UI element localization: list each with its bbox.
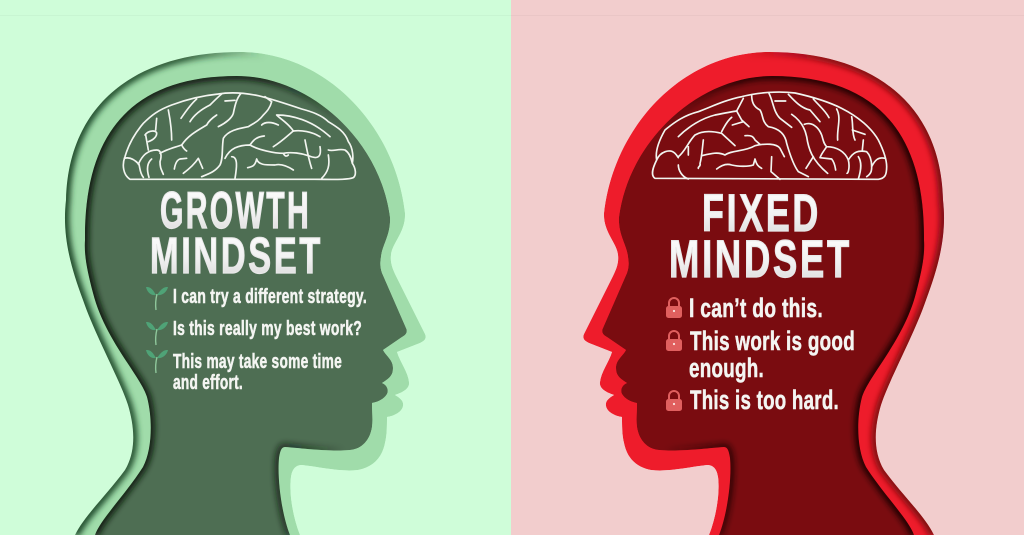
statement: This is too hard: This is too hard. — [690, 385, 839, 415]
icon: brain outline, fixed — [652, 92, 887, 179]
heading: growth mindset: GROWTH — [160, 182, 311, 240]
statement: This work is good enough: enough. — [689, 353, 764, 383]
panel: fixed mindset head — [583, 52, 944, 535]
heading: fixed mindset: MINDSET — [669, 230, 852, 289]
statement: This may take some time and effort: and effort. — [173, 372, 243, 394]
icon: sprout 1 — [146, 287, 168, 310]
statement: Is this really my best work: Is this really my best work? — [173, 318, 362, 340]
heading: fixed mindset: FIXED — [702, 184, 821, 243]
statement: This work is good enough — [689, 326, 855, 383]
icon: lock 3 — [666, 391, 682, 411]
head outer layer: bright red — [583, 52, 944, 535]
statement: This work is good enough: This work is good — [690, 326, 855, 356]
heading: fixed mindset — [669, 184, 852, 289]
icon: sprout 2 — [146, 322, 168, 345]
statement: This may take some time and effort: This may take some time — [173, 351, 342, 373]
head inner layer: dark red — [602, 76, 924, 535]
icon: lock 1 — [666, 298, 682, 318]
statement: I can't do this: I can’t do this. — [689, 293, 823, 323]
icon: brain outline, growth — [123, 93, 355, 179]
head inner layer: dark green — [85, 76, 407, 535]
statement: This may take some time and effort — [173, 351, 342, 394]
heading: growth mindset: MINDSET — [150, 227, 323, 284]
heading: growth mindset — [150, 182, 323, 284]
list: fixed mindset statements — [666, 293, 855, 415]
panel: fixed mindset background — [511, 0, 1024, 535]
icon: sprout 3 — [146, 350, 168, 373]
panel: growth mindset head — [65, 52, 426, 535]
list: growth mindset statements — [146, 286, 367, 394]
panel: growth mindset background — [0, 0, 511, 535]
icon: lock 2 — [666, 331, 682, 351]
statement: I can try a different strategy: I can try a different strategy. — [173, 286, 367, 308]
head outer layer: light green — [65, 52, 426, 535]
